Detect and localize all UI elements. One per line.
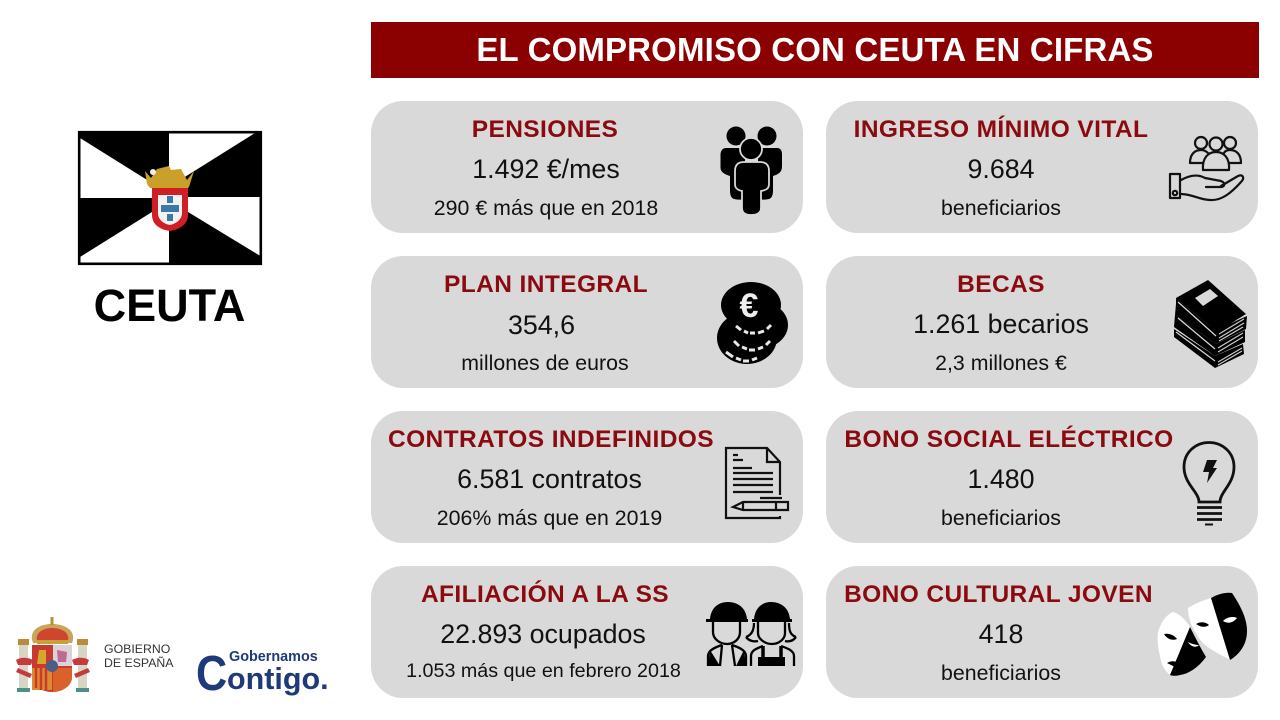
- logo text: Gobierno de España: [104, 642, 174, 670]
- heading: PENSIONES: [472, 116, 618, 143]
- value: 1.480: [967, 464, 1035, 494]
- icon: stack of books: [1174, 280, 1247, 368]
- logo: Gobernamos Contigo: Gobernamos: [229, 649, 318, 665]
- panel: afiliación a la SS: [371, 566, 803, 698]
- panel: pensiones: [371, 101, 803, 233]
- icon: light bulb: [1182, 441, 1236, 526]
- heading: BECAS: [957, 271, 1045, 298]
- value: 22.893 ocupados: [440, 619, 646, 649]
- place name: CEUTA: CEUTA: [94, 280, 245, 331]
- detail: 1.053 más que en febrero 2018: [406, 660, 681, 682]
- heading: BONO CULTURAL JOVEN: [844, 581, 1153, 608]
- icon: two workers with helmets: [706, 602, 797, 666]
- logo text: Gobierno de España: DE ESPAÑA: [104, 656, 173, 670]
- heading: AFILIACIÓN A LA SS: [421, 581, 669, 608]
- detail: millones de euros: [461, 351, 629, 375]
- heading: CONTRATOS INDEFINIDOS: [388, 426, 714, 453]
- heading: PLAN INTEGRAL: [444, 271, 648, 298]
- logo: Gobernamos Contigo: ontigo.: [227, 662, 329, 696]
- icon: stack of euro coins: €: [740, 287, 759, 325]
- title banner: EL COMPROMISO CON CEUTA EN CIFRAS: [476, 31, 1154, 68]
- value: 9.684: [967, 154, 1035, 184]
- icon: group of people: [720, 126, 782, 214]
- heading: INGRESO MÍNIMO VITAL: [854, 116, 1148, 143]
- detail: 2,3 millones €: [935, 351, 1067, 375]
- value: 1.261 becarios: [913, 309, 1089, 339]
- panel: becas: [826, 256, 1258, 388]
- detail: 290 € más que en 2018: [434, 196, 658, 220]
- panel: bono cultural joven: [826, 566, 1258, 698]
- logo: Spanish coat of arms: [16, 617, 90, 692]
- panel: ingreso mínimo vital: [826, 101, 1258, 233]
- detail: beneficiarios: [941, 196, 1061, 220]
- flag of Ceuta: [78, 130, 262, 266]
- detail: 206% más que en 2019: [437, 506, 662, 530]
- logo text: Gobierno de España: GOBIERNO: [104, 642, 170, 656]
- value: 354,6: [508, 310, 575, 340]
- heading: BONO SOCIAL ELÉCTRICO: [844, 426, 1174, 453]
- icon: contract document with pen: [724, 446, 790, 520]
- icon: hand holding people: [1168, 136, 1244, 202]
- detail: beneficiarios: [941, 661, 1061, 685]
- detail: beneficiarios: [941, 506, 1061, 530]
- logo: Gobernamos Contigo: [196, 647, 329, 701]
- panel: bono social eléctrico: [826, 411, 1258, 543]
- panel: plan integral: [371, 256, 803, 388]
- icon: stack of euro coins: [717, 282, 788, 364]
- title banner: [371, 22, 1259, 78]
- logo: Gobernamos Contigo: C: [196, 647, 227, 701]
- value: 418: [979, 619, 1023, 649]
- value: 6.581 contratos: [457, 464, 642, 494]
- icon: theatre masks: [1158, 592, 1247, 676]
- panel: contratos indefinidos: [371, 411, 803, 543]
- value: 1.492 €/mes: [472, 154, 620, 184]
